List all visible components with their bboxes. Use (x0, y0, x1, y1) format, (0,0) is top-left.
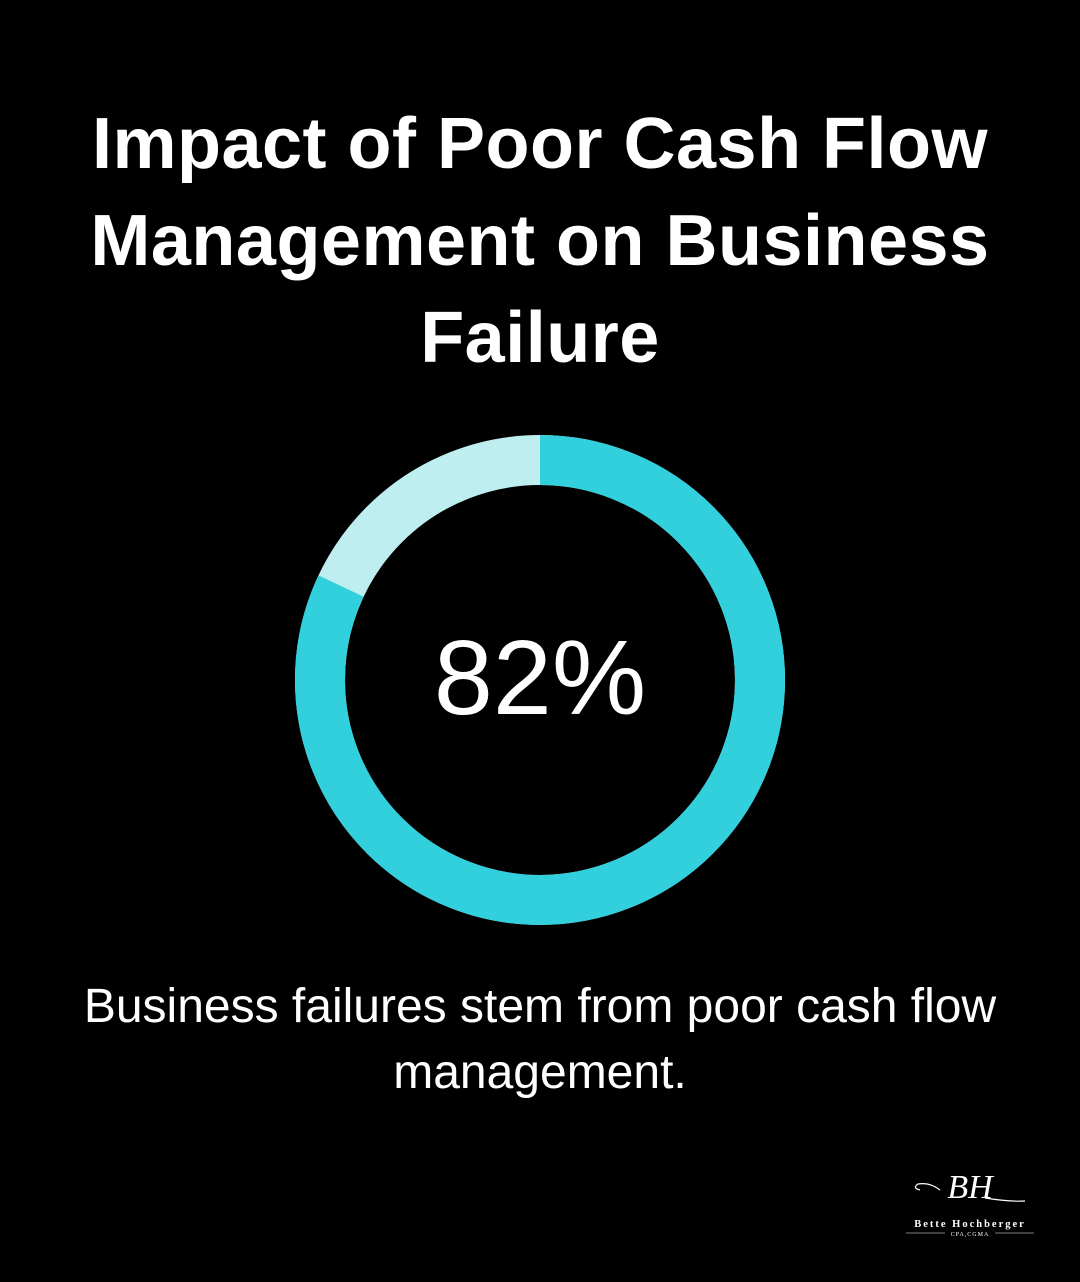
title: Impact of Poor Cash Flow (92, 104, 988, 184)
logo: Bette Hochberger (914, 1219, 1026, 1230)
82% segment (320, 460, 760, 900)
percentage label: 82% (434, 619, 646, 737)
logo (906, 1169, 1034, 1238)
logo: CPA,CGMA (951, 1232, 989, 1238)
title (90, 104, 990, 378)
title: Failure (420, 298, 660, 378)
light segment (320, 460, 760, 900)
title: Management on Business (90, 201, 990, 281)
caption: management. (393, 1046, 687, 1099)
logo: BH (947, 1169, 995, 1206)
caption: Business failures stem from poor cash flow (84, 980, 996, 1033)
caption (84, 980, 996, 1099)
